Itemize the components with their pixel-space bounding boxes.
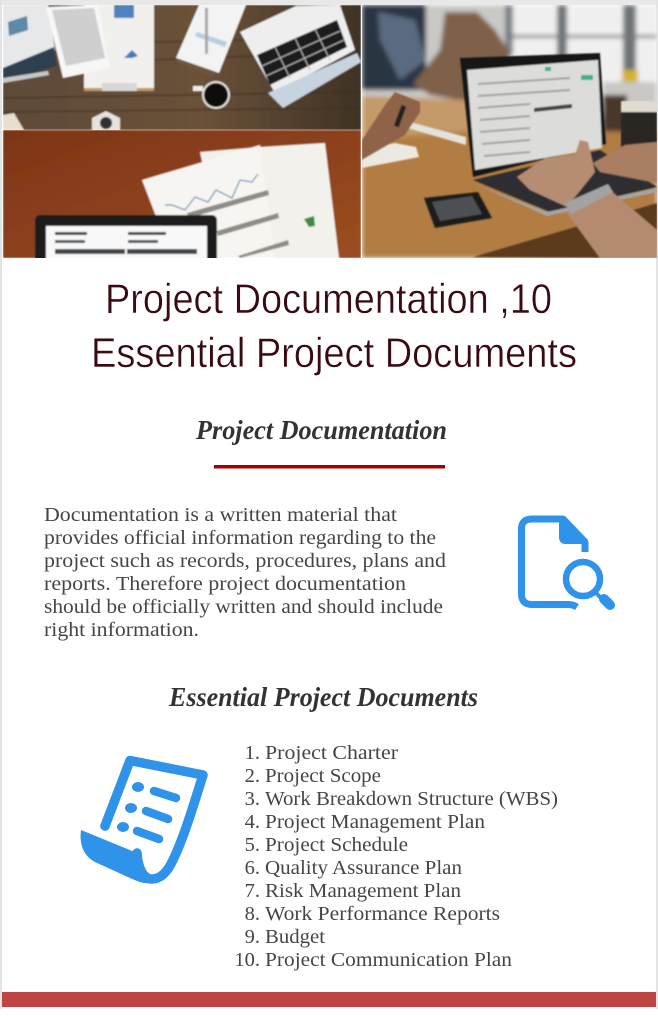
icon: document scroll with list — [81, 760, 203, 883]
numbered list of documents: 1. — [245, 742, 260, 764]
text block: documentation description: should be officially written and should include — [44, 596, 443, 618]
heading underline — [214, 465, 445, 468]
numbered list of documents: Project Schedule — [265, 834, 408, 856]
numbered list of documents — [234, 742, 558, 971]
numbered list of documents: 6. — [245, 857, 260, 879]
numbered list of documents: 4. — [245, 811, 260, 833]
numbered list of documents: Work Breakdown Structure (WBS) — [265, 788, 558, 810]
photo: reports on wooden table with tablet — [3, 130, 361, 265]
heading: Essential Project Documents: Essential Project Documents — [168, 682, 478, 712]
numbered list of documents: Project Management Plan — [265, 811, 485, 833]
numbered list of documents: 7. — [245, 880, 260, 902]
numbered list of documents: Project Communication Plan — [265, 949, 512, 971]
numbered list of documents: 9. — [245, 926, 260, 948]
title — [91, 275, 577, 376]
text block: documentation description: reports. Therefore project documentation — [44, 573, 406, 595]
title: Project Documentation ,10 — [105, 275, 552, 322]
numbered list of documents: Budget — [265, 926, 325, 948]
photo: desk with documents, laptop and coffee — [3, 5, 361, 130]
numbered list of documents: Quality Assurance Plan — [265, 857, 462, 879]
numbered list of documents: 5. — [245, 834, 260, 856]
numbered list of documents: 8. — [245, 903, 260, 925]
text block: documentation description — [44, 504, 446, 641]
footer bar — [2, 992, 656, 1007]
text block: documentation description: right information. — [44, 619, 199, 641]
photo: people working at a laptop — [362, 5, 657, 258]
text block: documentation description: provides official information regarding to the — [44, 527, 436, 549]
numbered list of documents: Project Charter — [265, 742, 398, 764]
numbered list of documents: Project Scope — [265, 765, 381, 787]
text block: documentation description: Documentation is a written material that — [44, 504, 397, 526]
numbered list of documents: 2. — [245, 765, 260, 787]
icon: document with magnifying glass — [522, 516, 610, 607]
numbered list of documents: 10. — [234, 949, 260, 971]
numbered list of documents: Risk Management Plan — [265, 880, 461, 902]
title: Essential Project Documents — [91, 329, 577, 376]
text block: documentation description: project such as records, procedures, plans and — [44, 550, 446, 572]
numbered list of documents: Work Performance Reports — [265, 903, 500, 925]
heading: Project Documentation: Project Documentation — [195, 415, 447, 445]
numbered list of documents: 3. — [245, 788, 260, 810]
